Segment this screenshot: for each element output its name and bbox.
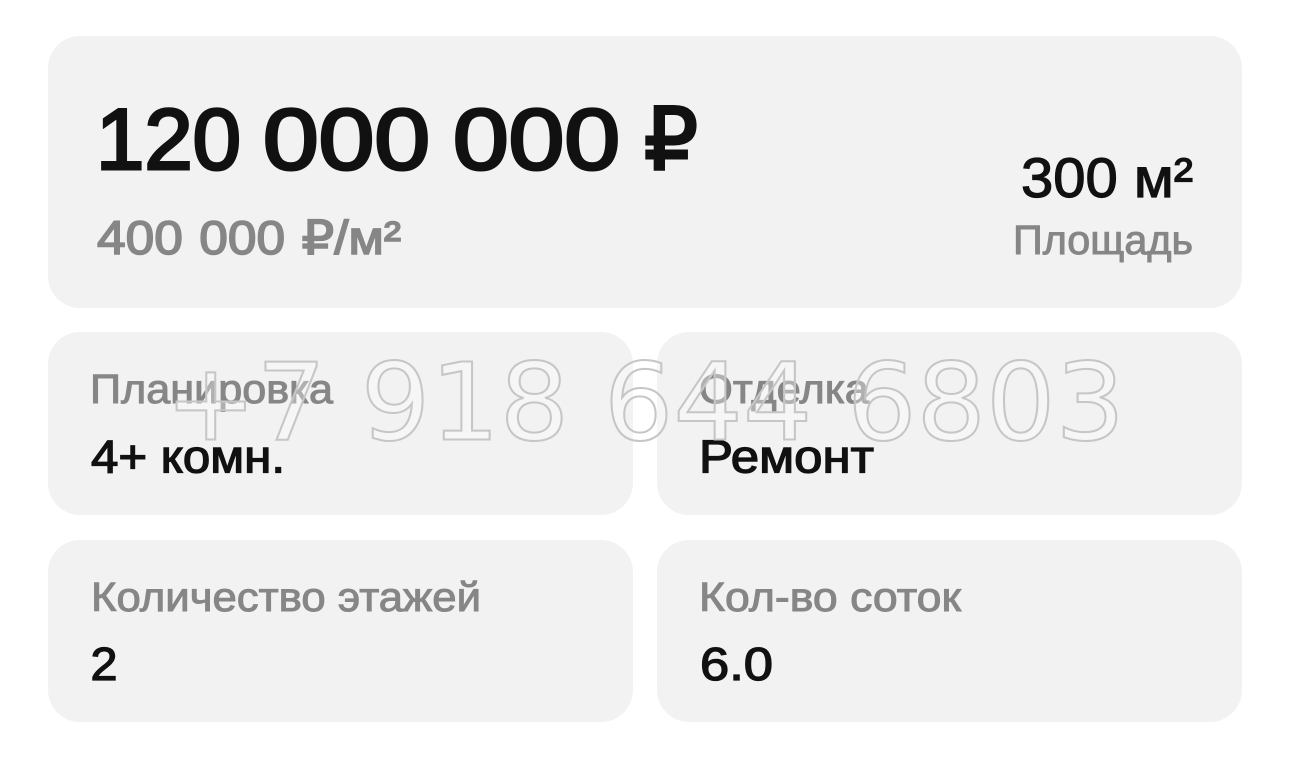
plot size label: Кол-во соток <box>699 574 962 620</box>
plot size value: 6.0 <box>700 638 773 690</box>
watermark: phone number: +7 918 644 6803 <box>165 342 1125 466</box>
price: 120 <box>96 92 241 188</box>
floors value: 2 <box>90 638 118 690</box>
price: ₽ <box>644 92 698 188</box>
panel: plot size <box>657 540 1242 722</box>
panel: finish <box>657 332 1242 515</box>
area value: 300 м² <box>1021 146 1193 209</box>
area label: Площадь <box>1013 217 1193 263</box>
panel: layout <box>48 332 633 515</box>
panel: price and area <box>48 36 1242 308</box>
finish value: Ремонт <box>699 430 874 482</box>
panel: floors <box>48 540 633 722</box>
price per square metre: 400 000 ₽/м² <box>97 211 401 264</box>
price: 000 <box>453 92 620 188</box>
floors label: Количество этажей <box>91 574 481 620</box>
finish label: Отделка <box>699 366 869 412</box>
layout value: 4+ комн. <box>91 430 285 482</box>
layout label: Планировка <box>90 366 333 412</box>
price: 000 <box>263 92 430 188</box>
